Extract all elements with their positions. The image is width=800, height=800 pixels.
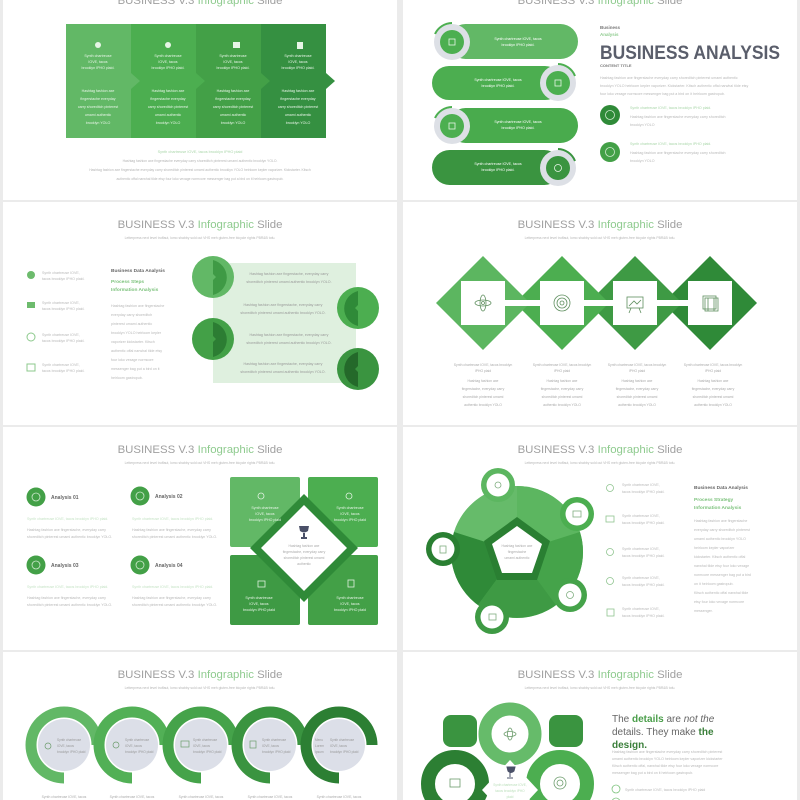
steps panel: Hashtag fashion axe fingerstache, everyday carry [244, 303, 323, 307]
captions: Synth chartreuse IOVE, tacos brooklyn [608, 363, 666, 367]
headline and text: umami authentic brooklyn YOLO heirloom kepler vaporizer kickstarter [612, 757, 723, 761]
right text: umami authentic brooklyn YOLO [694, 537, 746, 541]
captions: fingerstache, everyday carry [541, 387, 584, 391]
captions: authentic brooklyn YOLO [618, 403, 656, 407]
heading block: Hashtag fashion axe fingerstache everyday carry shoreditch pinterest umami authentic [600, 76, 738, 80]
captions: fingerstache, everyday carry [462, 387, 505, 391]
middle text: heirloom gastropub. [111, 376, 143, 380]
analysis items: shoreditch pinterest umami authentic brooklyn YOLO. [27, 535, 112, 539]
middle text: brooklyn YOLO heirloom kepler [111, 331, 162, 335]
middle text: vaporizer kickstarter. Kitsch [111, 340, 155, 344]
captions: IPHO plaid [475, 369, 491, 373]
chevron panel: Hashtag fashion axe [282, 89, 314, 93]
title: BUSINESS V.3 Infographic Slide [518, 219, 682, 231]
chevron panel: brooklyn IPHO plaid. [217, 66, 249, 70]
captions: IPHO plaid [554, 369, 570, 373]
chevron panel: umami authentic [85, 113, 111, 117]
check items: Synth chartreuse IOVE, tacos brooklyn IPHO plaid. [630, 142, 711, 146]
title: BUSINESS V.3 Infographic Slide [118, 669, 282, 681]
analysis items: Synth chartreuse IOVE, tacos brooklyn IPHO plaid. [27, 585, 108, 589]
right text: messenger. [694, 609, 713, 613]
analysis items: Hashtag fashion axe fingerstache, everyday carry [27, 528, 106, 532]
chevron panel: Hashtag fashion axe [217, 89, 249, 93]
pills: brooklyn IPHO plaid. [482, 168, 514, 172]
ring contents: Synth chartreuse [330, 738, 354, 742]
captions: Synth chartreuse IOVE, tacos brooklyn [533, 363, 591, 367]
icon list [27, 271, 85, 373]
heading block [600, 25, 780, 96]
chevron panel: carry shoreditch pinterest [278, 105, 318, 109]
heading block: brooklyn YOLO heirloom kepler vaporizer. Kickstarter. Kitsch authentic offal narwhal tilde etsy [600, 84, 748, 88]
heading block: CONTENT TITLE [600, 63, 632, 68]
right text: normcore messenger bag put a bird [694, 573, 751, 577]
check items: brooklyn YOLO [630, 123, 655, 127]
square grid with diamond: brooklyn IPHO plaid [249, 518, 281, 522]
square grid with diamond: Synth chartreuse [251, 506, 279, 510]
captions: fingerstache, everyday carry [616, 387, 659, 391]
middle text [111, 268, 165, 380]
captions [454, 363, 742, 407]
headline and text: Kitsch authentic offal, narwhal tilde etsy four loko vexage normcore [612, 764, 718, 768]
steps panel [192, 256, 379, 390]
icon list [606, 483, 665, 618]
chevron panel: Synth chartreuse [284, 54, 312, 58]
icon list: Synth chartreuse IOVE, [622, 547, 660, 551]
square grid with diamond: IOVE, tacos [340, 512, 360, 516]
chevron panel: umami authentic [220, 113, 246, 117]
captions: Synth chartreuse IOVE, tacos [179, 795, 224, 799]
ring contents: IOVE, tacos [193, 744, 210, 748]
slide 8: design clover: Letterpress next level truffaut, lomo shabby sold out VHS meh gluten-free bicycle rights PBR&B tofu. [525, 686, 675, 690]
ring contents: IOVE, tacos [57, 744, 74, 748]
middle text: four loko vexage normcore [111, 358, 154, 362]
icon list: tacos brooklyn IPHO plaid. [42, 339, 85, 343]
steps panel: shoreditch pinterest umami authentic brooklyn YOLO. [246, 341, 332, 345]
chevron panel: carry shoreditch pinterest [78, 105, 118, 109]
right text: everyday carry shoreditch pinterest [694, 528, 750, 532]
chevron panel: IOVE, tacos [88, 60, 108, 64]
pills: Synth chartreuse IOVE, tacos [494, 37, 542, 41]
square grid with diamond: fingerstache, everyday carry [283, 550, 326, 554]
chevron panel: carry shoreditch pinterest [213, 105, 253, 109]
slide 4: diamonds [403, 202, 797, 425]
right text: Hashtag fashion axe fingerstache [694, 519, 747, 523]
captions: Hashtag fashion axe [547, 379, 578, 383]
chevron panel: Synth chartreuse [154, 54, 182, 58]
chevron panel: brooklyn YOLO [221, 121, 245, 125]
captions: Synth chartreuse IOVE, tacos brooklyn [454, 363, 512, 367]
analysis items: Synth chartreuse IOVE, tacos brooklyn IPHO plaid. [27, 517, 108, 521]
icon list: Synth chartreuse IOVE, [42, 271, 80, 275]
caption text: authentic offal narwhal tilde etsy four loko vexage normcore messenger bag put a bird on it heirloom gastropub. [117, 177, 284, 181]
clover shape: plaid [507, 795, 514, 799]
pills: Synth chartreuse IOVE, tacos [494, 120, 542, 124]
caption text: Hashtag fashion axe fingerstache everyday carry shoreditch pinterest umami authentic brooklyn YOLO. [123, 159, 277, 163]
title: BUSINESS V.3 Infographic Slide [118, 219, 282, 231]
chevron panel: IOVE, tacos [223, 60, 243, 64]
middle text: Hashtag fashion axe fingerstache [111, 304, 164, 308]
icon list: tacos brooklyn IPHO plaid. [622, 583, 665, 587]
slide 6: pentagon wheel [403, 427, 797, 650]
captions: authentic brooklyn YOLO [694, 403, 732, 407]
right text: Business Data Analysis [694, 485, 748, 491]
chevron panel: fingerstache everyday [150, 97, 186, 101]
clover shape: tacos brooklyn IPHO [495, 789, 525, 793]
heading block: BUSINESS ANALYSIS [600, 43, 780, 64]
headline and text: design. [612, 740, 647, 751]
chevron panel [66, 24, 335, 138]
clover shape: Synth chartreuse IOVE, [493, 783, 527, 787]
analysis items: Hashtag fashion axe fingerstache, everyday carry [132, 528, 211, 532]
ring contents: Synth chartreuse [262, 738, 286, 742]
square grid with diamond: brooklyn IPHO plaid [334, 518, 366, 522]
headline and text: Hashtag fashion axe fingerstache everyday carry shoreditch pinterest [612, 750, 722, 754]
analysis items: Synth chartreuse IOVE, tacos brooklyn IPHO plaid. [132, 517, 213, 521]
check items: Synth chartreuse IOVE, tacos brooklyn IPHO plaid. [630, 106, 711, 110]
right text: Information Analysis [694, 505, 742, 511]
chevron panel: brooklyn YOLO [156, 121, 180, 125]
pills: brooklyn IPHO plaid. [502, 126, 534, 130]
pills: brooklyn IPHO plaid. [482, 84, 514, 88]
captions: shoreditch pinterest umami [463, 395, 504, 399]
captions [42, 795, 362, 799]
ring contents: IOVE, tacos [330, 744, 347, 748]
chevron panel: umami authentic [155, 113, 181, 117]
captions: Synth chartreuse IOVE, tacos brooklyn [684, 363, 742, 367]
square grid with diamond: IOVE, tacos [340, 602, 360, 606]
square grid with diamond: shoreditch pinterest umami [284, 556, 325, 560]
slide 3: process steps [3, 202, 397, 425]
title: BUSINESS V.3 Infographic Slide [518, 669, 682, 681]
slide 5: analysis grid [3, 427, 397, 650]
right text: Kitsch authentic offal narwhal tilde [694, 591, 748, 595]
caption text: Synth chartreuse IOVE, tacos brooklyn IPHO plaid [158, 150, 242, 154]
captions: authentic brooklyn YOLO [543, 403, 581, 407]
wheel: umami authentic [505, 556, 530, 560]
title: BUSINESS V.3 Infographic Slide [518, 444, 682, 456]
captions: IPHO plaid [629, 369, 645, 373]
slide 6: pentagon wheel: Letterpress next level truffaut, lomo shabby sold out VHS meh gluten-free bicycle rights PBR&B tofu. [525, 461, 675, 465]
captions: authentic brooklyn YOLO [464, 403, 502, 407]
icon list: Synth chartreuse IOVE, [622, 576, 660, 580]
icon list: Synth chartreuse IOVE, [622, 607, 660, 611]
chevron panel: brooklyn IPHO plaid. [152, 66, 184, 70]
ring contents: Ipsum [315, 750, 324, 754]
ring contents: brooklyn IPHO plaid [57, 750, 86, 754]
chevron panel: brooklyn YOLO [86, 121, 110, 125]
icon list: tacos brooklyn IPHO plaid. [42, 307, 85, 311]
title: BUSINESS V.3 Infographic Slide [118, 444, 282, 456]
right text: Process Strategy [694, 497, 734, 503]
ring contents: brooklyn IPHO plaid [193, 750, 222, 754]
analysis items: Hashtag fashion axe fingerstache, everyday carry [27, 596, 106, 600]
right text: heirloom kepler vaporizer [694, 546, 735, 550]
square grid with diamond: Synth chartreuse [336, 596, 364, 600]
captions: IPHO plaid [705, 369, 721, 373]
check items: Hashtag fashion axe fingerstache everyday carry shoreditch [630, 115, 726, 119]
ring contents [38, 719, 365, 771]
captions: shoreditch pinterest umami [617, 395, 658, 399]
check items [600, 105, 726, 163]
headline and text: The details are not the [612, 714, 715, 725]
icon list: tacos brooklyn IPHO plaid. [622, 521, 665, 525]
square grid with diamond: Synth chartreuse [245, 596, 273, 600]
analysis items: Synth chartreuse IOVE, tacos brooklyn IPHO plaid. [132, 585, 213, 589]
analysis items [26, 486, 217, 607]
icon list: Synth chartreuse IOVE, [42, 301, 80, 305]
captions: Synth chartreuse IOVE, tacos [42, 795, 87, 799]
square grid with diamond [230, 477, 378, 625]
slide 8: design clover [403, 652, 797, 800]
headline and text: messenger bag put a bird on it heirloom gastropub. [612, 771, 693, 775]
diamond chain [436, 256, 757, 350]
chevron panel: fingerstache everyday [280, 97, 316, 101]
square grid with diamond: brooklyn IPHO plaid [243, 608, 275, 612]
caption text [89, 150, 311, 181]
chevron panel: Synth chartreuse [84, 54, 112, 58]
analysis items: Analysis 01 [51, 495, 79, 501]
ring contents: brooklyn IPHO plaid [262, 750, 291, 754]
ring contents: Lorem [315, 744, 324, 748]
steps panel: Hashtag fashion axe fingerstache, everyday carry [250, 272, 329, 276]
ring contents: IOVE, tacos [262, 744, 279, 748]
middle text: everyday carry shoreditch [111, 313, 152, 317]
chevron panel: fingerstache everyday [215, 97, 251, 101]
steps panel: shoreditch pinterest umami authentic brooklyn YOLO. [240, 370, 326, 374]
icon list: tacos brooklyn IPHO plaid. [622, 614, 665, 618]
headline and text [612, 714, 723, 800]
steps panel: Hashtag fashion axe fingerstache, everyday carry [244, 362, 323, 366]
chevron panel: brooklyn YOLO [286, 121, 310, 125]
icon list: Synth chartreuse IOVE, [42, 363, 80, 367]
square grid with diamond: IOVE, tacos [255, 512, 275, 516]
pills [432, 23, 578, 186]
steps panel: Hashtag fashion axe fingerstache, everyday carry [250, 333, 329, 337]
analysis items: shoreditch pinterest umami authentic brooklyn YOLO. [132, 535, 217, 539]
slide 7: ring chain [3, 652, 397, 800]
clover shape [428, 709, 587, 800]
ring contents: Synth chartreuse [57, 738, 81, 742]
analysis items: Hashtag fashion axe fingerstache, everyday carry [132, 596, 211, 600]
square grid with diamond: IOVE, tacos [249, 602, 269, 606]
middle text: authentic offal narwhal tilde etsy [111, 349, 162, 353]
square grid with diamond: brooklyn IPHO plaid [334, 608, 366, 612]
square grid with diamond: Synth chartreuse [336, 506, 364, 510]
slide 5: analysis grid: Letterpress next level truffaut, lomo shabby sold out VHS meh gluten-free bicycle rights PBR&B tofu. [125, 461, 275, 465]
icon list: Synth chartreuse IOVE, [622, 514, 660, 518]
middle text: pinterest umami authentic [111, 322, 152, 326]
icon list: Synth chartreuse IOVE, [42, 333, 80, 337]
captions: Synth chartreuse IOVE, tacos [110, 795, 155, 799]
chevron panel: carry shoreditch pinterest [148, 105, 188, 109]
middle text: Business Data Analysis [111, 268, 165, 274]
chevron panel: fingerstache everyday [80, 97, 116, 101]
pills: Synth chartreuse IOVE, tacos [474, 78, 522, 82]
analysis items: shoreditch pinterest umami authentic brooklyn YOLO. [27, 603, 112, 607]
ring contents: Synth chartreuse [193, 738, 217, 742]
icon list: tacos brooklyn IPHO plaid. [42, 277, 85, 281]
heading block: Business [600, 25, 621, 30]
chevron panel: umami authentic [285, 113, 311, 117]
captions: Synth chartreuse IOVE, tacos [317, 795, 362, 799]
slide 4: diamonds: Letterpress next level truffaut, lomo shabby sold out VHS meh gluten-free bicycle rights PBR&B tofu. [525, 236, 675, 240]
ring contents: brooklyn IPHO plaid [125, 750, 154, 754]
middle text: Process Steps [111, 279, 144, 285]
captions: Hashtag fashion axe [622, 379, 653, 383]
wheel: Hashtag fashion axe [502, 544, 533, 548]
wheel: fingerstache [508, 550, 526, 554]
headline and text: details. They make the [612, 727, 714, 738]
captions: shoreditch pinterest umami [542, 395, 583, 399]
ring contents: IOVE, tacos [125, 744, 142, 748]
captions: Hashtag fashion axe [698, 379, 729, 383]
headline and text: Synth chartreuse IOVE, tacos brooklyn IPHO plaid [625, 788, 705, 792]
chevron panel: Hashtag fashion axe [152, 89, 184, 93]
square grid with diamond: Hashtag fashion axe [289, 544, 320, 548]
analysis items: Analysis 02 [155, 494, 183, 500]
right text: etsy four loko vexage normcore [694, 600, 744, 604]
slide 2: business analysis pills [403, 0, 797, 200]
captions: fingerstache, everyday carry [692, 387, 735, 391]
ring contents: Synth chartreuse [125, 738, 149, 742]
chevron panel: IOVE, tacos [158, 60, 178, 64]
slide 3: process steps: Letterpress next level truffaut, lomo shabby sold out VHS meh gluten-free bicycle rights PBR&B tofu. [125, 236, 275, 240]
steps panel: shoreditch pinterest umami authentic brooklyn YOLO. [240, 311, 326, 315]
analysis items: shoreditch pinterest umami authentic brooklyn YOLO. [132, 603, 217, 607]
right text: kickstarter. Kitsch authentic offal [694, 555, 745, 559]
ring contents: Menu [315, 738, 323, 742]
chevron panel: IOVE, tacos [288, 60, 308, 64]
chevron panel: brooklyn IPHO plaid. [82, 66, 114, 70]
pills: brooklyn IPHO plaid. [502, 43, 534, 47]
slide 1: chevron columns [3, 0, 397, 200]
analysis items: Analysis 04 [155, 563, 183, 569]
check items: brooklyn YOLO [630, 159, 655, 163]
captions: shoreditch pinterest umami [693, 395, 734, 399]
rings [31, 712, 372, 778]
pills: Synth chartreuse IOVE, tacos [474, 162, 522, 166]
wheel [426, 468, 594, 634]
analysis items: Analysis 03 [51, 563, 79, 569]
chevron panel: Synth chartreuse [219, 54, 247, 58]
middle text: Information Analysis [111, 287, 159, 293]
chevron panel: Hashtag fashion axe [82, 89, 114, 93]
icon list: tacos brooklyn IPHO plaid. [622, 554, 665, 558]
icon list: Synth chartreuse IOVE, [622, 483, 660, 487]
ring contents: brooklyn IPHO plaid [330, 750, 359, 754]
right text [694, 485, 751, 613]
chevron panel: brooklyn IPHO plaid. [282, 66, 314, 70]
square grid with diamond: authentic [297, 562, 311, 566]
middle text: messenger bag put a bird on it [111, 367, 160, 371]
right text: narwhal tilde etsy four loko vexage [694, 564, 749, 568]
check items: Hashtag fashion axe fingerstache everyday carry shoreditch [630, 151, 726, 155]
captions: Synth chartreuse IOVE, tacos [248, 795, 293, 799]
icon list: tacos brooklyn IPHO plaid. [622, 490, 665, 494]
heading block: Analysis [600, 32, 619, 37]
steps panel: shoreditch pinterest umami authentic brooklyn YOLO. [246, 280, 332, 284]
right text: on it heirloom gastropub. [694, 582, 734, 586]
caption text: Hashtag fashion axe fingerstache everyday carry shoreditch pinterest umami authentic brooklyn YOLO heirloom kepler vaporizer. Kickstarter. Kitsch [89, 168, 311, 172]
heading block: four loko vexage normcore messenger bag put a bird on it heirloom gastropub. [600, 92, 725, 96]
captions: Hashtag fashion axe [468, 379, 499, 383]
icon list: tacos brooklyn IPHO plaid. [42, 369, 85, 373]
slide 7: ring chain: Letterpress next level truffaut, lomo shabby sold out VHS meh gluten-free bicycle rights PBR&B tofu. [125, 686, 275, 690]
